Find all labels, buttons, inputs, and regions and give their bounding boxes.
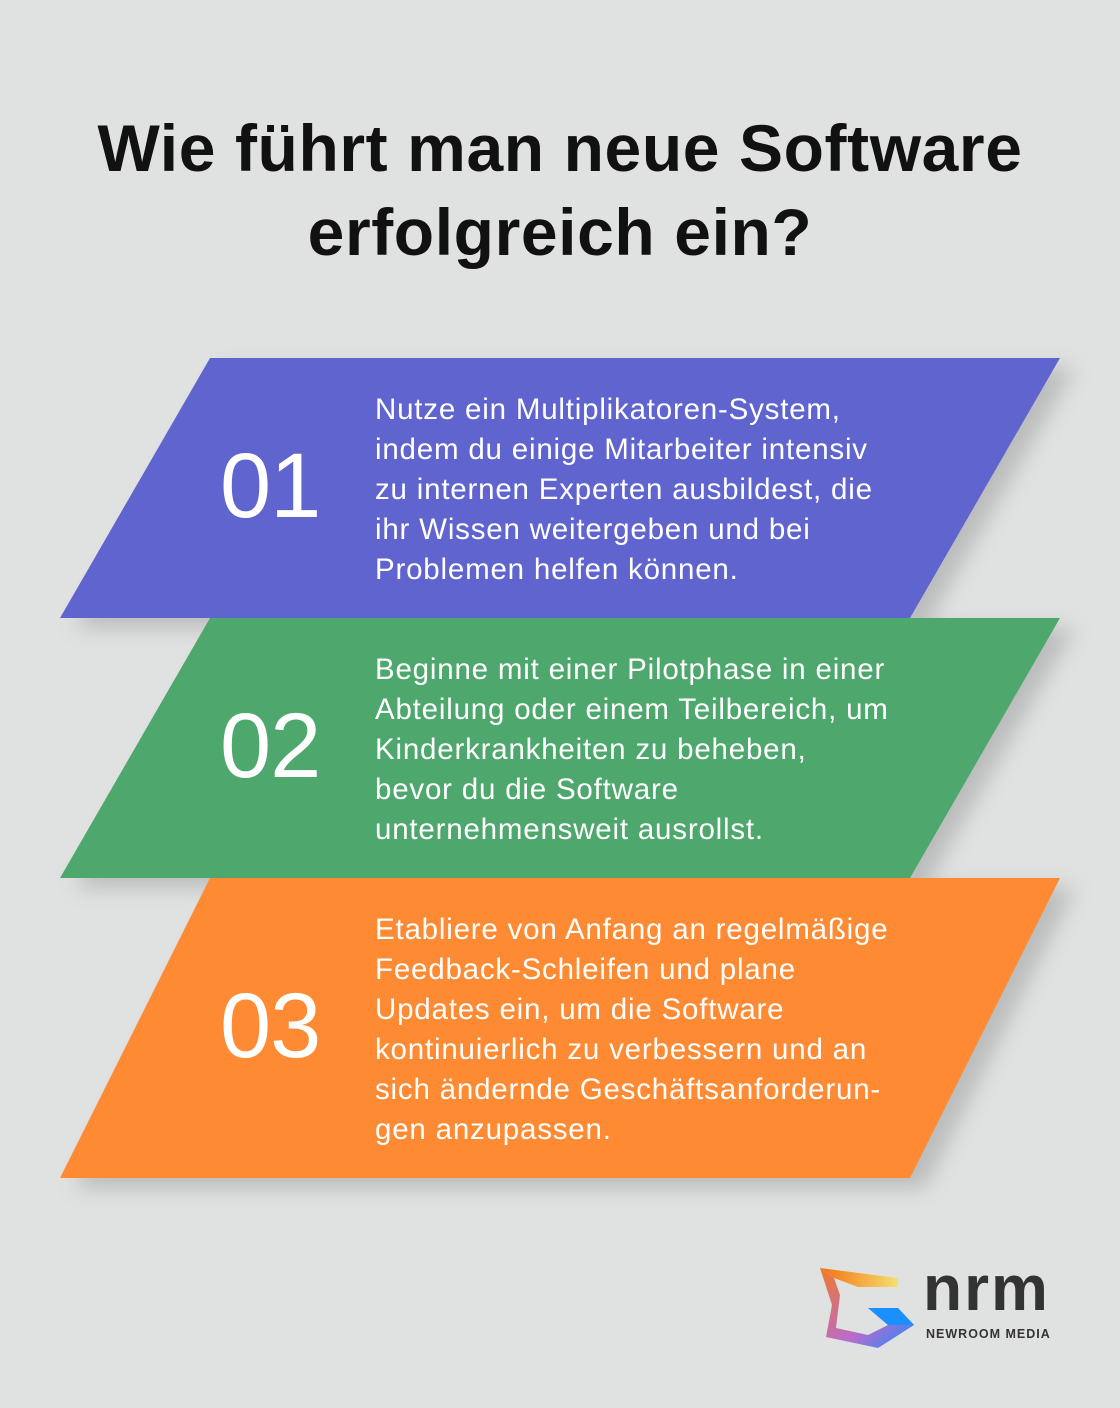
text 03: gen anzupassen. [375,1113,612,1146]
text 03: sich ändernde Geschäftsanforderun- [375,1073,881,1106]
text 03: Etabliere von Anfang an regelmäßige [375,913,888,946]
text 03: Updates ein, um die Software [375,993,784,1026]
text 02: bevor du die Software [375,773,679,806]
text 01: Problemen helfen können. [375,553,739,586]
text 01: zu internen Experten ausbildest, die [375,473,873,506]
text 02: Abteilung oder einem Teilbereich, um [375,693,889,726]
text 03 [375,913,888,1146]
band 2 [60,618,1060,878]
title: erfolgreich ein? [308,195,812,269]
title: Wie führt man neue Software [97,111,1023,185]
title [97,111,1023,269]
step 01 [220,393,873,586]
number 03: 03 [220,975,320,1077]
text 02: Beginne mit einer Pilotphase in einer [375,653,885,686]
step 03 [220,913,888,1146]
text 03: Feedback-Schleifen und plane [375,953,796,986]
band 3 [60,878,1060,1178]
number 01: 01 [220,435,320,537]
logo: NEWROOM MEDIA [926,1327,1051,1341]
logo [820,1252,1051,1348]
band 1 [60,358,1060,618]
text 01 [375,393,873,586]
text 01: indem du einige Mitarbeiter intensiv [375,433,868,466]
text 02: Kinderkrankheiten zu beheben, [375,733,807,766]
text 02: unternehmensweit ausrollst. [375,813,764,846]
step 02 [220,653,889,846]
text 01: ihr Wissen weitergeben und bei [375,513,811,546]
wordmark: nrm [923,1252,1050,1324]
text 03: kontinuierlich zu verbessern und an [375,1033,867,1066]
icon: logo mark [820,1268,914,1348]
text 01: Nutze ein Multiplikatoren-System, [375,393,841,426]
text 02 [375,653,889,846]
number 02: 02 [220,695,320,797]
